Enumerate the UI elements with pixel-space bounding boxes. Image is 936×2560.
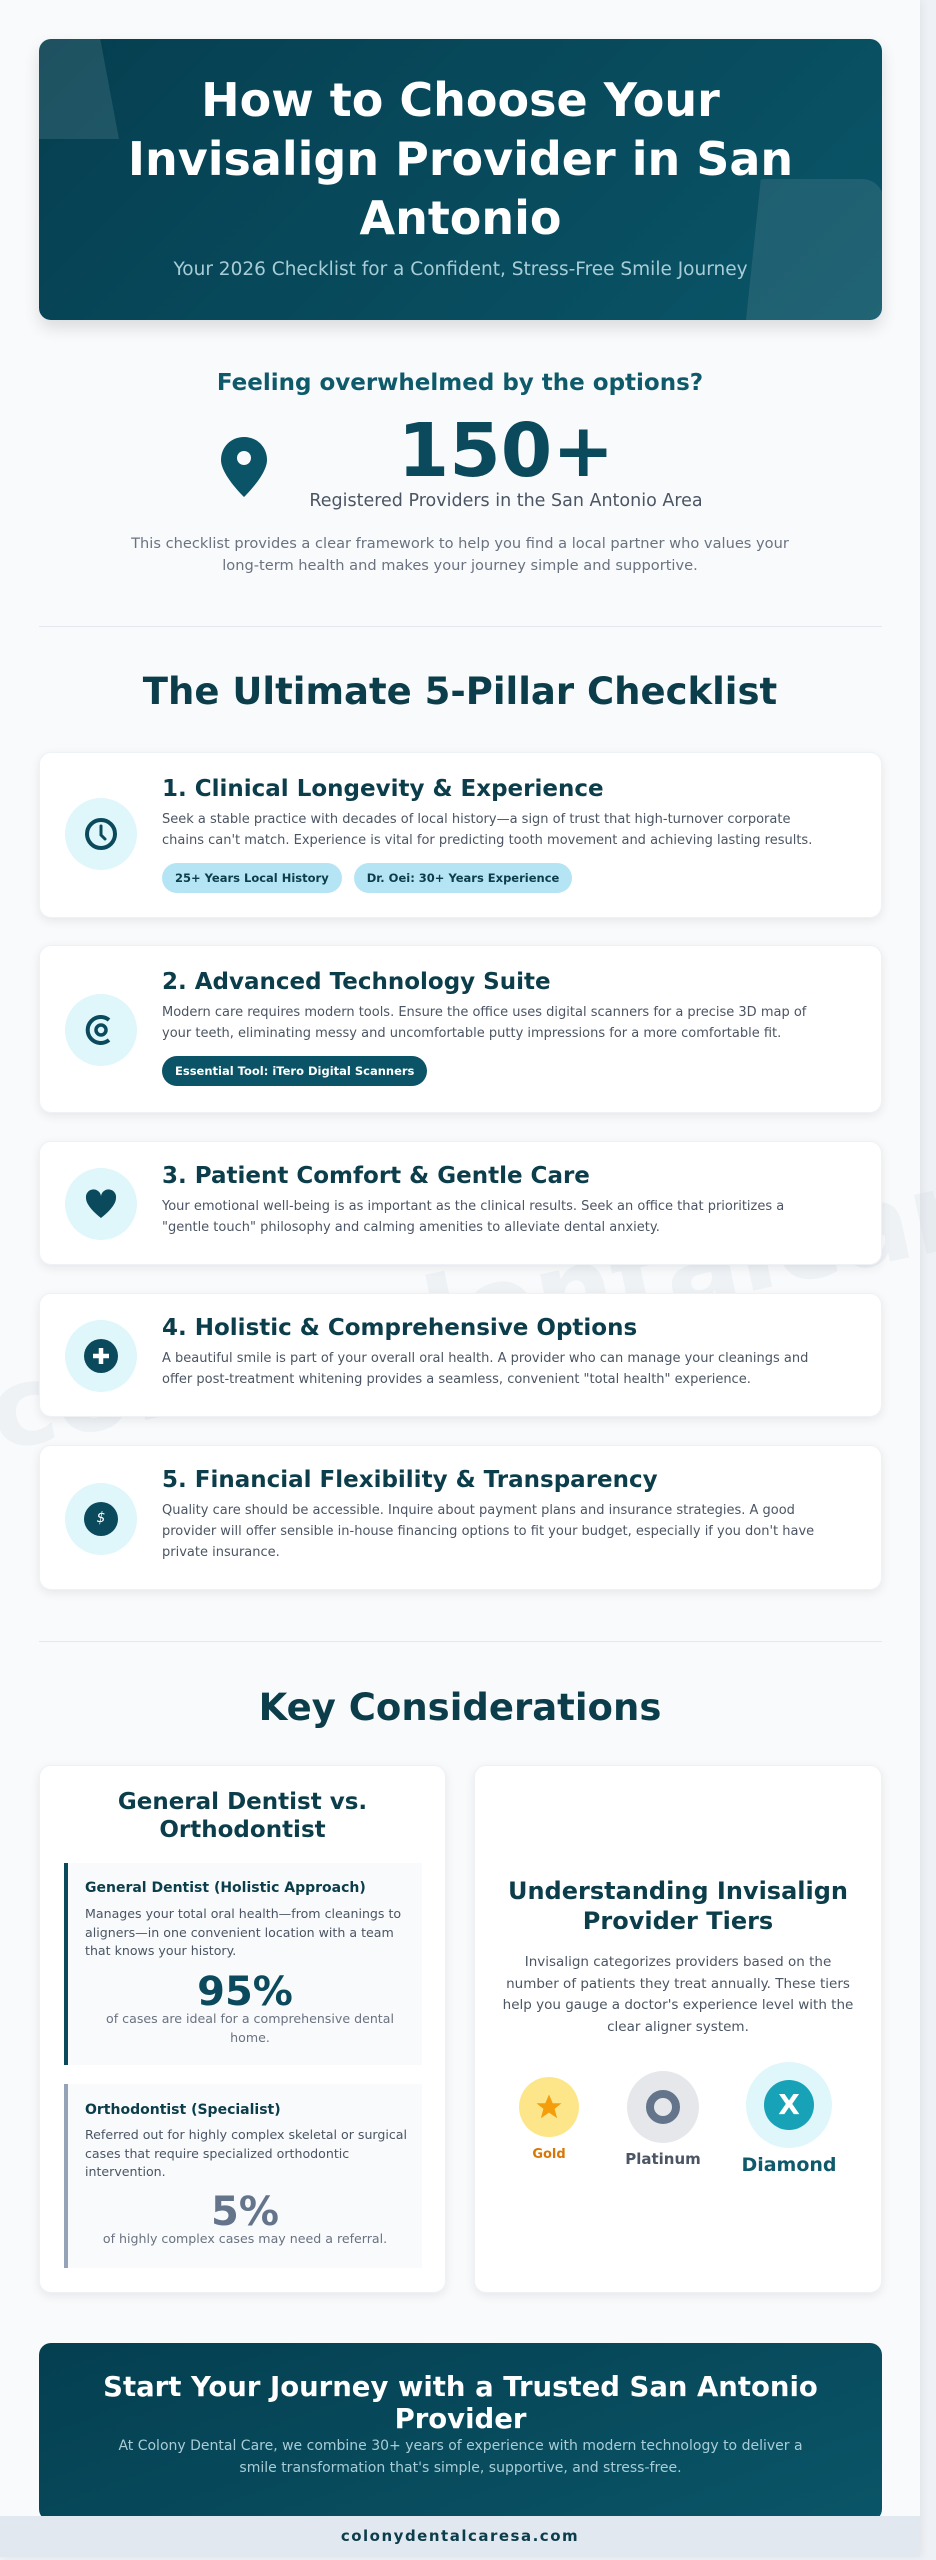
- icon: clock: [65, 798, 137, 870]
- CTA text: At Colony Dental Care, we combine 30+ years of experience with modern technology to deliver a smile transformation that's simple, supportive, and stress-free.: [118, 2438, 803, 2476]
- panel: general dentist vs orthodontist: [39, 1765, 446, 2293]
- section heading: key considerations: Key Considerations: [259, 1686, 661, 1729]
- text: pillar 1: 1. Clinical Longevity & Experience: [162, 776, 604, 802]
- icon: money: [65, 1483, 137, 1555]
- panel: pillar 5: [39, 1445, 882, 1590]
- icon: location pin: [221, 437, 267, 497]
- text: pillar 5: 5. Financial Flexibility & Transparency: [162, 1467, 658, 1493]
- heading: Understanding Invisalign: [508, 1877, 848, 1905]
- text: pillar 2: 2. Advanced Technology Suite: [162, 969, 551, 995]
- call to action banner: [39, 2343, 882, 2521]
- decorative shape top-left: [39, 39, 119, 139]
- panel: pillar 4: [39, 1293, 882, 1417]
- tier: diamond: [741, 2062, 837, 2176]
- box: general dentist: of cases are ideal for a comprehensive dental home.: [106, 2011, 394, 2044]
- text: pillar 1: Seek a stable practice with decades of local history—a sign of trust that high-turnover corporate chains can't match. Experience is vital for predicting tooth movement and achieving lasting results.: [162, 812, 812, 848]
- heading: Orthodontist: [159, 1817, 326, 1843]
- title: How to Choose Your Invisalign Provider in San Antonio: [128, 73, 793, 245]
- text: pillar 1: Dr. Oei: 30+ Years Experience: [367, 871, 559, 885]
- text: pillar 1: 25+ Years Local History: [175, 871, 329, 885]
- text: pillar 5: Quality care should be accessible. Inquire about payment plans and insurance strategies. A good provider will offer sensible in-house financing options to fit your budget, especially if you don't have private insurance.: [162, 1503, 814, 1560]
- text: pillar 5: [162, 1467, 814, 1560]
- heading: Provider Tiers: [583, 1907, 773, 1935]
- box: orthodontist: Referred out for highly complex skeletal or surgical cases that require specialized orthodontic intervention.: [85, 2127, 407, 2179]
- decorative bag shape bottom-right: [746, 179, 882, 320]
- intro heading: Feeling overwhelmed by the options?: [217, 370, 703, 396]
- icon: money: $: [97, 1510, 105, 1526]
- icon: heart: [65, 1168, 137, 1240]
- box: orthodontist: [64, 2084, 422, 2268]
- tier: platinum: Platinum: [625, 2150, 701, 2168]
- text: pillar 4: [162, 1315, 808, 1387]
- text: pillar 3: Your emotional well-being is as important as the clinical results. Seek an office that prioritizes a "gentle touch" philosophy and calming amenities to alleviate dental anxiety.: [162, 1199, 784, 1235]
- CTA heading: Start Your Journey with a Trusted San Antonio Provider: [103, 2371, 818, 2435]
- heading: [508, 1877, 848, 1935]
- tier: diamond: X: [778, 2088, 800, 2121]
- text: pillar 3: [162, 1163, 784, 1235]
- icon: scanner: [65, 994, 137, 1066]
- tier: gold: [519, 2077, 579, 2162]
- panel: pillar 1: [39, 752, 882, 918]
- stat 95%: 95%: [197, 1969, 293, 2015]
- heading: [118, 1789, 367, 1843]
- box: general dentist: General Dentist (Holistic Approach): [85, 1880, 366, 1896]
- panel: pillar 3: [39, 1141, 882, 1265]
- text: pillar 1: [162, 776, 812, 893]
- stat 5%: 5%: [211, 2189, 279, 2235]
- intro paragraph: This checklist provides a clear framework to help you find a local partner who values your long-term health and makes your journey simple and supportive.: [131, 535, 789, 574]
- header banner: [39, 39, 882, 320]
- section heading: checklist: The Ultimate 5-Pillar Checklist: [143, 670, 777, 713]
- panel: provider tiers: [474, 1765, 882, 2293]
- footer: [0, 2516, 920, 2557]
- text: pillar 3: 3. Patient Comfort & Gentle Care: [162, 1163, 590, 1189]
- heading: General Dentist vs.: [118, 1789, 367, 1815]
- subtitle: Your 2026 Checklist for a Confident, Stress-Free Smile Journey: [173, 259, 748, 280]
- tier: diamond: Diamond: [741, 2154, 837, 2176]
- text: pillar 2: Essential Tool: iTero Digital Scanners: [175, 1064, 414, 1078]
- box: general dentist: Manages your total oral health—from cleanings to aligners—in one convenient location with a team that knows your history.: [85, 1906, 401, 1958]
- text: pillar 2: Modern care requires modern tools. Ensure the office uses digital scanners for a precise 3D map of your teeth, eliminating messy and uncomfortable putty impressions for a more comfortable fit.: [162, 1005, 806, 1041]
- tier: platinum: [625, 2071, 701, 2168]
- text: pillar 4: 4. Holistic & Comprehensive Options: [162, 1315, 637, 1341]
- stat: 150+: 150+: [398, 408, 614, 494]
- paragraph: Invisalign categorizes providers based on the number of patients they treat annually. These tiers help you gauge a doctor's experience level with the clear aligner system.: [503, 1954, 853, 2034]
- text: pillar 2: [162, 969, 807, 1086]
- footer: colonydentalcaresa.com: [341, 2527, 579, 2545]
- box: orthodontist: Orthodontist (Specialist): [85, 2102, 281, 2118]
- box: general dentist: [64, 1863, 422, 2065]
- panel: pillar 2: [39, 945, 882, 1113]
- tier: gold: Gold: [532, 2147, 566, 2162]
- stat label: Registered Providers in the San Antonio Area: [309, 491, 703, 511]
- icon: plus: [65, 1320, 137, 1392]
- box: orthodontist: of highly complex cases may need a referral.: [103, 2231, 387, 2246]
- text: pillar 4: A beautiful smile is part of your overall oral health. A provider who can manage your cleanings and offer post-treatment whitening provides a seamless, convenient "total health" experience.: [162, 1351, 808, 1387]
